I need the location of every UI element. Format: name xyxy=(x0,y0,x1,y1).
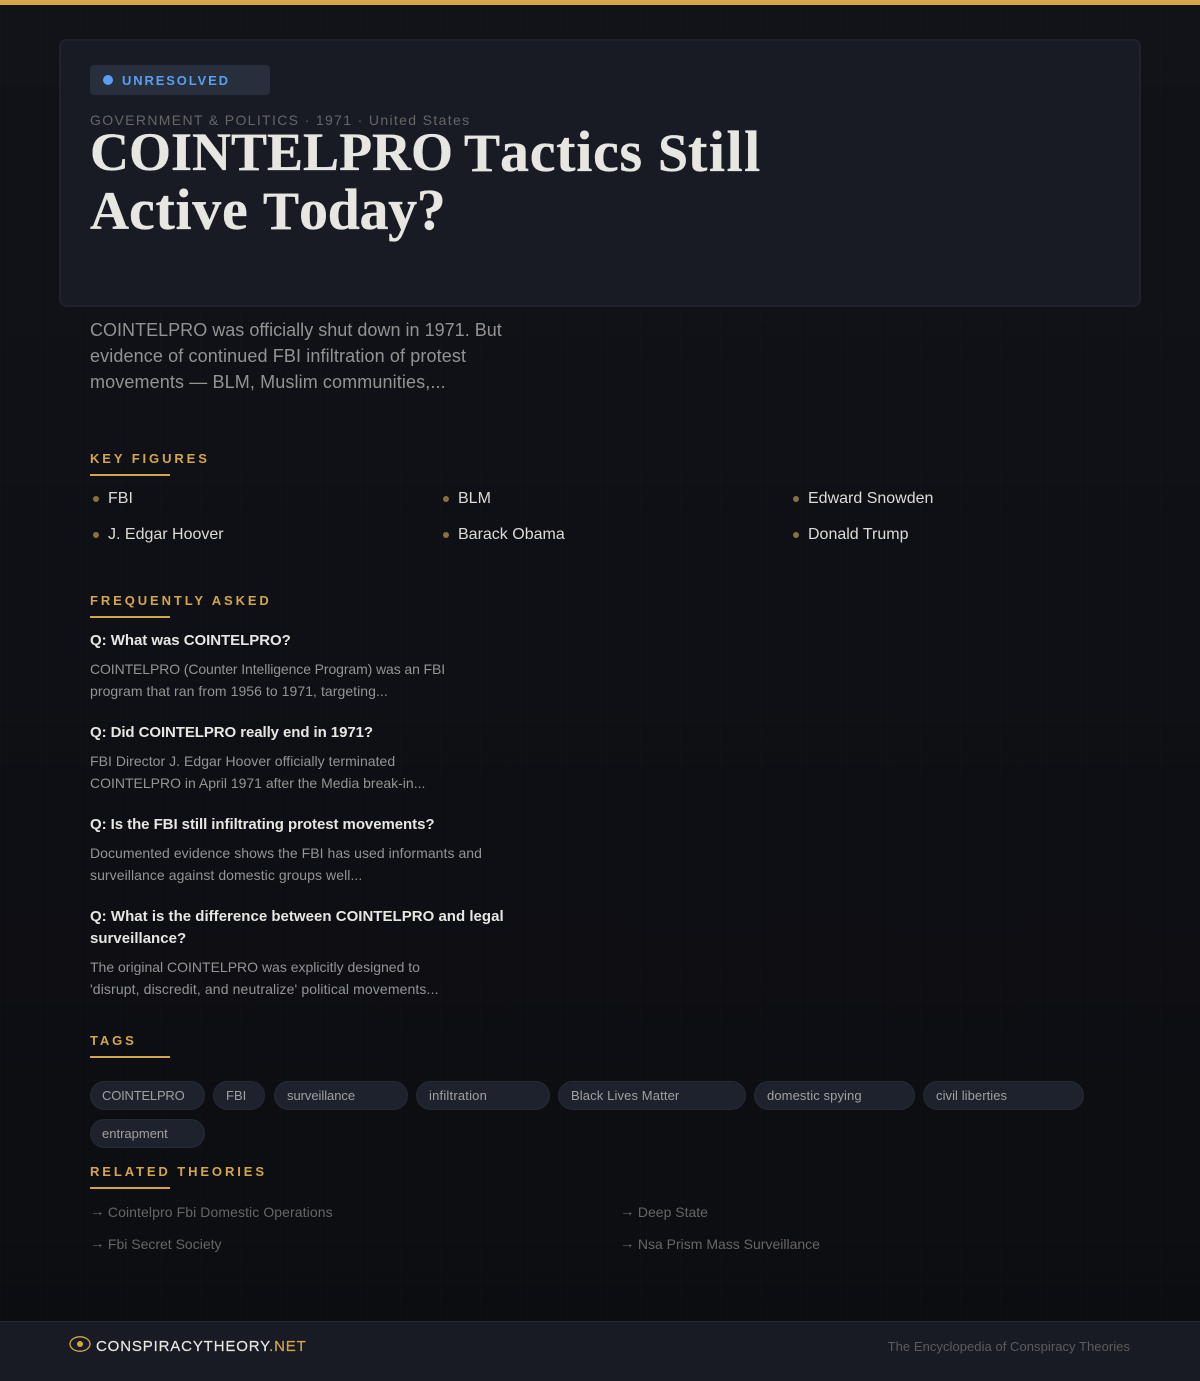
figure: BLM: BLM xyxy=(458,490,491,507)
answer 3 xyxy=(90,845,482,883)
category and date line: GOVERNMENT & POLITICS · 1971 · United States xyxy=(90,112,470,128)
link: Fbi Secret Society: Fbi Secret Society xyxy=(108,1236,222,1252)
title: Still xyxy=(658,119,762,184)
figure: J. Edgar Hoover: J. Edgar Hoover xyxy=(108,526,224,543)
footer tagline: The Encyclopedia of Conspiracy Theories xyxy=(888,1339,1130,1354)
tag: FBI xyxy=(213,1081,265,1110)
link: Deep State: → xyxy=(620,1203,635,1219)
link: Deep State: Deep State xyxy=(638,1204,708,1220)
answer 2: COINTELPRO in April 1971 after the Media break-in... xyxy=(90,775,425,791)
tag: Black Lives Matter: Black Lives Matter xyxy=(571,1088,679,1103)
question 3: Q: Is the FBI still infiltrating protest movements? xyxy=(90,816,434,833)
link: Fbi Secret Society: → xyxy=(90,1235,105,1251)
panel: related theories links xyxy=(90,1203,820,1252)
heading: tags: TAGS xyxy=(90,1033,137,1048)
figure: Edward Snowden: Edward Snowden xyxy=(808,490,933,507)
answer 1: COINTELPRO (Counter Intelligence Program) was an FBI xyxy=(90,661,445,677)
figure: FBI: FBI xyxy=(108,490,133,507)
link: Nsa Prism Mass Surveillance: Nsa Prism Mass Surveillance xyxy=(638,1236,820,1252)
tag: civil liberties: civil liberties xyxy=(936,1088,1007,1103)
answer 2: FBI Director J. Edgar Hoover officially terminated xyxy=(90,753,395,769)
panel: tags xyxy=(90,1081,1084,1148)
icon: eye logo xyxy=(69,1336,91,1352)
tag: FBI: FBI xyxy=(226,1088,246,1103)
answer 1 xyxy=(90,661,445,699)
answer 1: program that ran from 1956 to 1971, targeting... xyxy=(90,683,388,699)
intro summary: evidence of continued FBI infiltration of protest xyxy=(90,346,466,366)
heading: key figures: KEY FIGURES xyxy=(90,451,210,466)
heading: frequently asked: FREQUENTLY ASKED xyxy=(90,593,272,608)
answer 4 xyxy=(90,959,439,997)
answer 3: surveillance against domestic groups well... xyxy=(90,867,362,883)
panel: hero header xyxy=(59,39,1141,307)
footer xyxy=(0,1321,1200,1381)
question 4: surveillance? xyxy=(90,930,186,947)
heading: related theories: RELATED THEORIES xyxy=(90,1164,267,1179)
tag: COINTELPRO: COINTELPRO xyxy=(102,1088,185,1103)
tag: infiltration xyxy=(416,1081,550,1110)
link: Cointelpro Fbi Domestic Operations: Cointelpro Fbi Domestic Operations xyxy=(108,1204,333,1220)
intro summary: COINTELPRO was officially shut down in 1971. But xyxy=(90,320,502,340)
figure: FBI xyxy=(93,490,133,507)
tag: Black Lives Matter xyxy=(558,1081,746,1110)
answer 3: Documented evidence shows the FBI has used informants and xyxy=(90,845,482,861)
figure: Donald Trump: Donald Trump xyxy=(808,526,908,543)
tag: domestic spying: domestic spying xyxy=(767,1088,862,1103)
title: Tactics xyxy=(464,119,643,184)
top accent bar xyxy=(0,0,1200,5)
intro summary: movements — BLM, Muslim communities,... xyxy=(90,372,446,392)
tag: COINTELPRO xyxy=(90,1081,205,1110)
figure: BLM xyxy=(443,490,491,507)
icon: status dot xyxy=(103,75,113,85)
answer 2 xyxy=(90,753,425,791)
title: COINTELPRO xyxy=(90,122,453,182)
tag: domestic spying xyxy=(754,1081,915,1110)
question 4: Q: What is the difference between COINTELPRO and legal xyxy=(90,908,504,925)
question 2: Q: Did COINTELPRO really end in 1971? xyxy=(90,724,373,741)
title: Today? xyxy=(263,177,445,242)
tag: infiltration: infiltration xyxy=(429,1088,487,1103)
question 4 xyxy=(90,908,504,947)
status badge: unresolved xyxy=(90,65,270,95)
intro summary xyxy=(90,320,502,392)
tag: civil liberties xyxy=(923,1081,1084,1110)
link: Cointelpro Fbi Domestic Operations: → xyxy=(90,1203,105,1219)
tag: entrapment: entrapment xyxy=(102,1126,168,1141)
title: Active xyxy=(90,177,248,242)
tag: entrapment xyxy=(90,1119,205,1148)
answer 4: 'disrupt, discredit, and neutralize' political movements... xyxy=(90,981,439,997)
brand wordmark: CONSPIRACYTHEORY.NET xyxy=(96,1338,307,1355)
panel: key figures list xyxy=(93,490,933,543)
question 1: Q: What was COINTELPRO? xyxy=(90,632,291,649)
tag: surveillance xyxy=(274,1081,408,1110)
tag: surveillance: surveillance xyxy=(287,1088,355,1103)
title xyxy=(90,119,762,242)
answer 4: The original COINTELPRO was explicitly designed to xyxy=(90,959,420,975)
figure: Barack Obama: Barack Obama xyxy=(458,526,565,543)
link: Nsa Prism Mass Surveillance: → xyxy=(620,1235,635,1251)
badge label: UNRESOLVED xyxy=(122,73,230,88)
